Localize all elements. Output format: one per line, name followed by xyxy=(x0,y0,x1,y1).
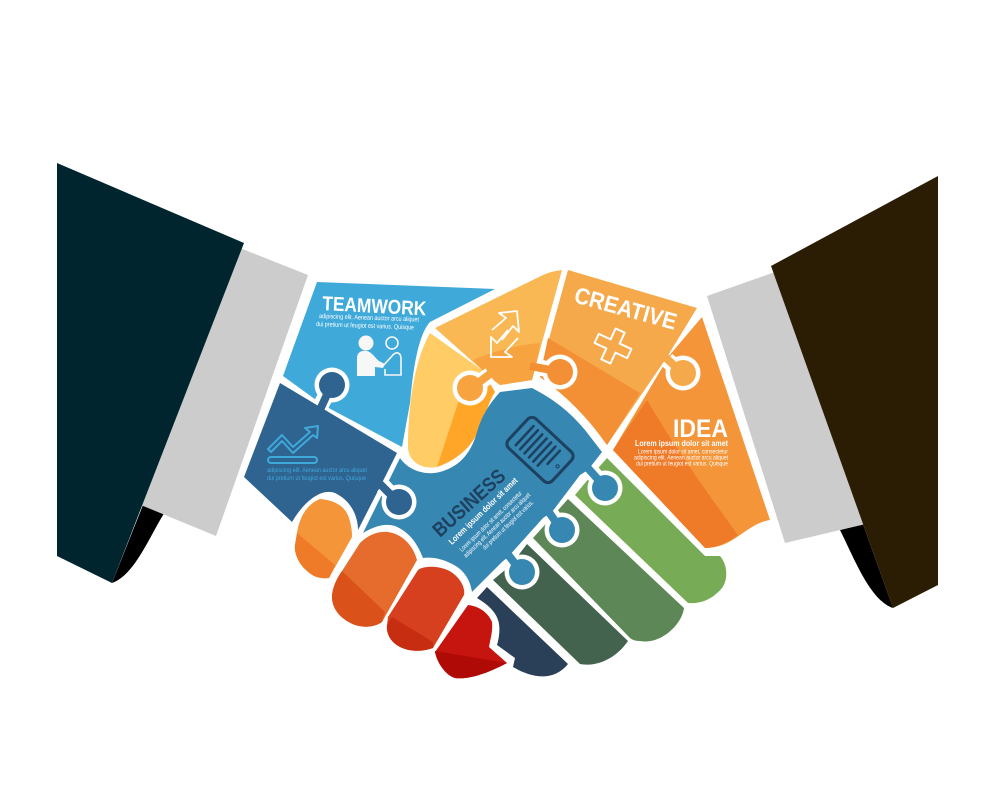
finger: light green xyxy=(575,458,726,603)
tab: arrows into creative xyxy=(530,354,578,390)
heading: teamwork: TEAMWORK xyxy=(322,293,427,320)
panel: idea xyxy=(613,317,770,548)
growth body text: dui pretium ut feugiot est varius. Quisque xyxy=(267,475,366,482)
business body text: adipiscing elit. Aenean auctor arcu aliquet xyxy=(463,492,532,559)
idea body text: Lorem ipsum dolor sit amet, consectetur xyxy=(638,448,729,456)
fingers: right hand xyxy=(477,458,726,676)
icon: two arrows xyxy=(491,311,519,357)
panel: growth xyxy=(244,368,416,530)
growth body text xyxy=(267,467,367,482)
tab: creative into idea xyxy=(664,356,700,390)
finger: mid green xyxy=(533,499,684,642)
business body text: dui pretium ut feugiot est varius. xyxy=(482,499,535,551)
panel: creative xyxy=(540,270,700,445)
finger: navy xyxy=(477,587,568,676)
tab: growth into business xyxy=(376,480,416,520)
idea body text: adipiscing elit. Aenean auctor arcu aliquet xyxy=(634,454,728,462)
left sleeve xyxy=(57,163,308,583)
icon: growth arrow xyxy=(268,426,318,463)
tab: growth into teamwork xyxy=(314,368,350,412)
panel: arrows piece xyxy=(435,270,578,406)
panel: yellow piece xyxy=(408,333,495,468)
growth body text: adipiscing elit. Aenean auctor arcu aliquet xyxy=(267,467,367,474)
idea body text: dui pretium ut feugiot est varius. Quisque xyxy=(636,460,728,468)
teamwork body text: dui pretium ut feugiot est varius. Quisque xyxy=(316,321,414,331)
finger: dark green xyxy=(493,544,628,665)
idea body text: Lorem ipsum dolor sit amet xyxy=(635,438,728,448)
heading: creative: CREATIVE xyxy=(572,282,680,335)
heading: idea: IDEA xyxy=(673,415,728,443)
icon: plus xyxy=(590,323,636,369)
finger: thumb xyxy=(295,499,352,578)
fingers: left hand xyxy=(295,499,507,678)
icon: two people shaking hands xyxy=(357,336,401,376)
heading: business: BUSINESS xyxy=(429,465,510,542)
business body text: Lorem ipsum dolor sit amet xyxy=(446,475,520,546)
panel: business xyxy=(363,388,622,592)
finger: orange red xyxy=(387,567,464,651)
icon: tablet xyxy=(504,415,576,485)
tabs: business into fingers xyxy=(504,466,622,590)
tab: arrows into yellow xyxy=(452,370,490,406)
business body text: Lorem ipsum dolor sit amet, consectetur xyxy=(459,490,524,553)
idea body text xyxy=(634,438,729,468)
teamwork body text xyxy=(316,313,419,331)
panel: teamwork xyxy=(283,282,495,447)
right sleeve xyxy=(707,176,938,608)
finger: red xyxy=(435,605,507,678)
teamwork body text: adipiscing elit. Aenean auctor arcu aliquet xyxy=(319,313,419,323)
finger: deep orange xyxy=(332,532,417,627)
